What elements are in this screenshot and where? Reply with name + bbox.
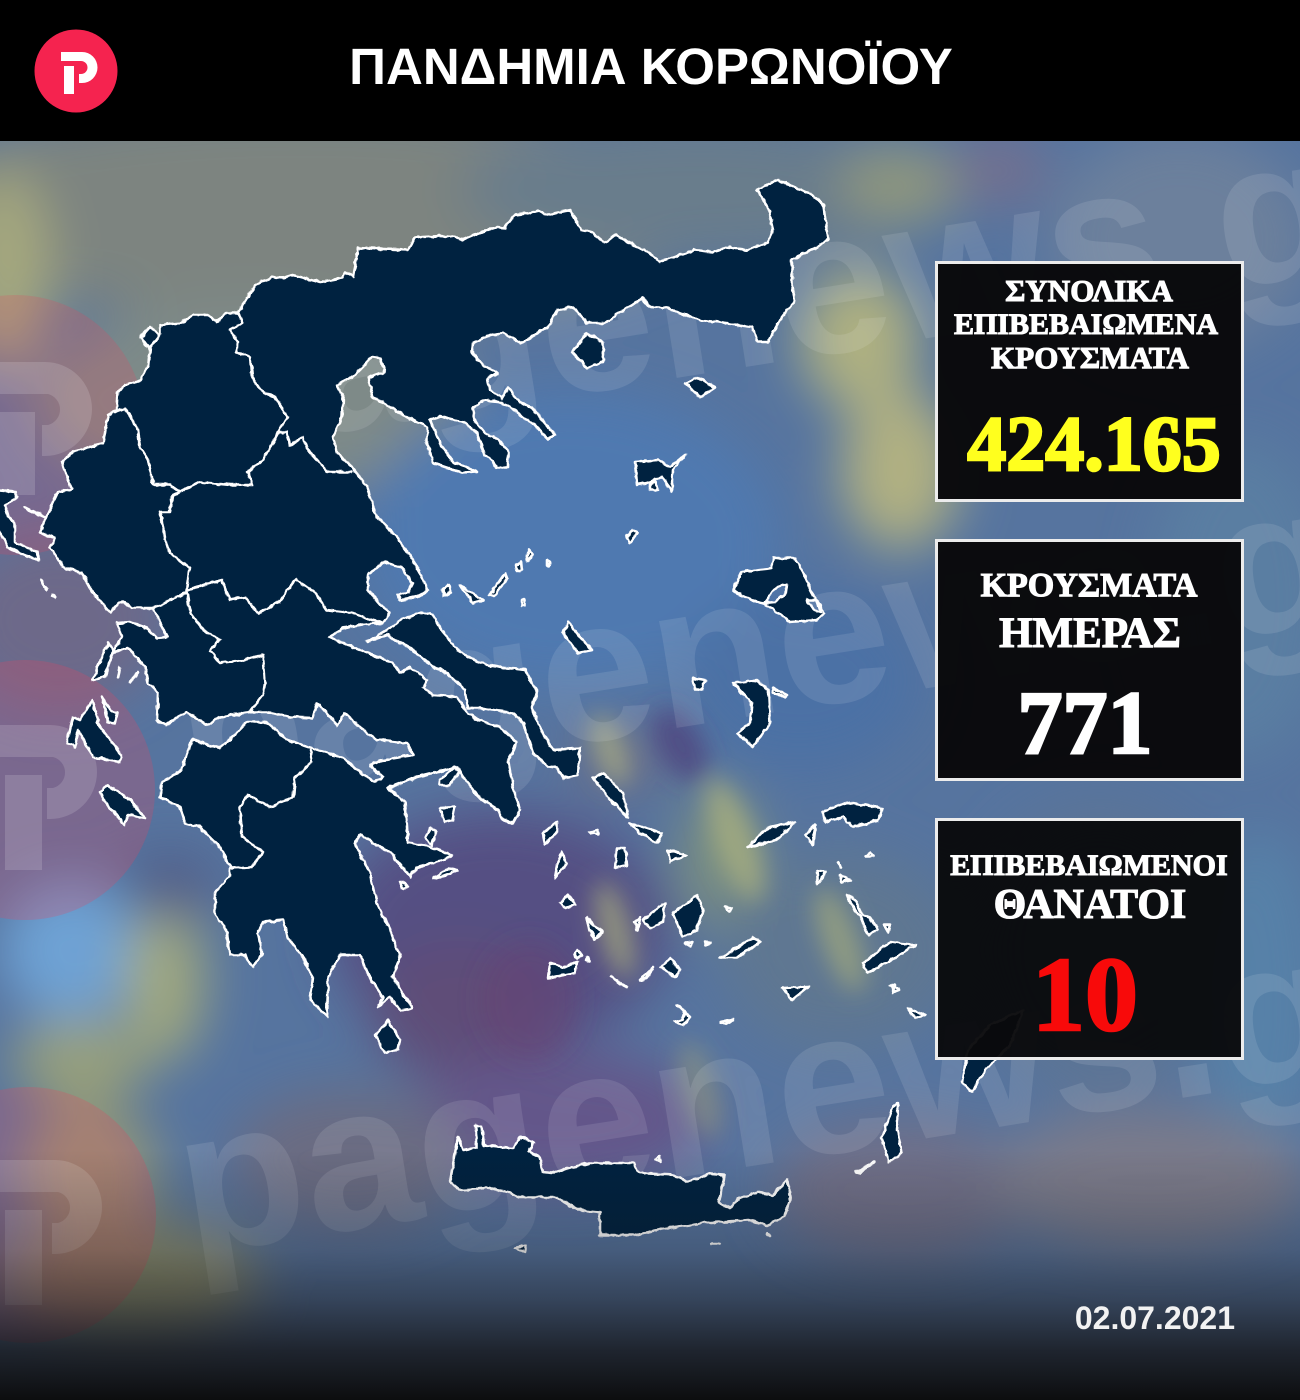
panel: total confirmed cases: ΚΡΟΥΣΜΑΤΑ	[991, 340, 1189, 375]
Rhodes	[962, 1010, 1023, 1092]
watermark logo: circles with P	[0, 295, 156, 1343]
regional borders	[115, 313, 383, 868]
panel: total confirmed cases	[936, 262, 1242, 500]
Karpathos and Kasos	[856, 1103, 902, 1173]
panel: daily cases: 771	[1018, 674, 1152, 773]
North Aegean islands	[572, 333, 603, 368]
Evia	[367, 612, 580, 778]
Ionian islands	[92, 643, 113, 680]
title: ΠΑΝΔΗΜΙΑ ΚΟΡΩΝΟΪΟΥ	[349, 38, 953, 95]
panel: confirmed deaths: ΘΑΝΑΤΟΙ	[994, 882, 1186, 928]
panel: daily cases	[936, 540, 1242, 780]
Lesvos	[733, 558, 825, 622]
panel: total confirmed cases: 424.165	[967, 400, 1221, 487]
panel: confirmed deaths	[936, 820, 1242, 1058]
watermark text	[161, 76, 1300, 1298]
header bar	[0, 0, 1300, 141]
bottom dark fade	[0, 1150, 1300, 1400]
panel: confirmed deaths: 10	[1032, 936, 1138, 1053]
date: 02.07.2021	[1075, 1300, 1235, 1336]
panel: total confirmed cases: ΕΠΙΒΕΒΑΙΩΜΕΝΑ	[954, 308, 1218, 341]
Saronic islands	[400, 767, 459, 889]
Crete	[450, 1125, 791, 1235]
mainland	[40, 180, 828, 1017]
panel: confirmed deaths: ΕΠΙΒΕΒΑΙΩΜΕΝΟΙ	[950, 849, 1228, 882]
panel: daily cases: ΗΜΕΡΑΣ	[999, 610, 1181, 657]
map of Greece	[0, 180, 1023, 1253]
Prespa lake	[140, 327, 160, 348]
Skyros, Chios, Psara	[563, 622, 592, 653]
Cyclades and Dodecanese islands	[543, 773, 925, 1026]
panel: total confirmed cases: ΣΥΝΟΛΙΚΑ	[1005, 273, 1173, 308]
logo	[34, 30, 118, 112]
Corfu	[0, 490, 38, 560]
panel: daily cases: ΚΡΟΥΣΜΑΤΑ	[981, 567, 1198, 604]
